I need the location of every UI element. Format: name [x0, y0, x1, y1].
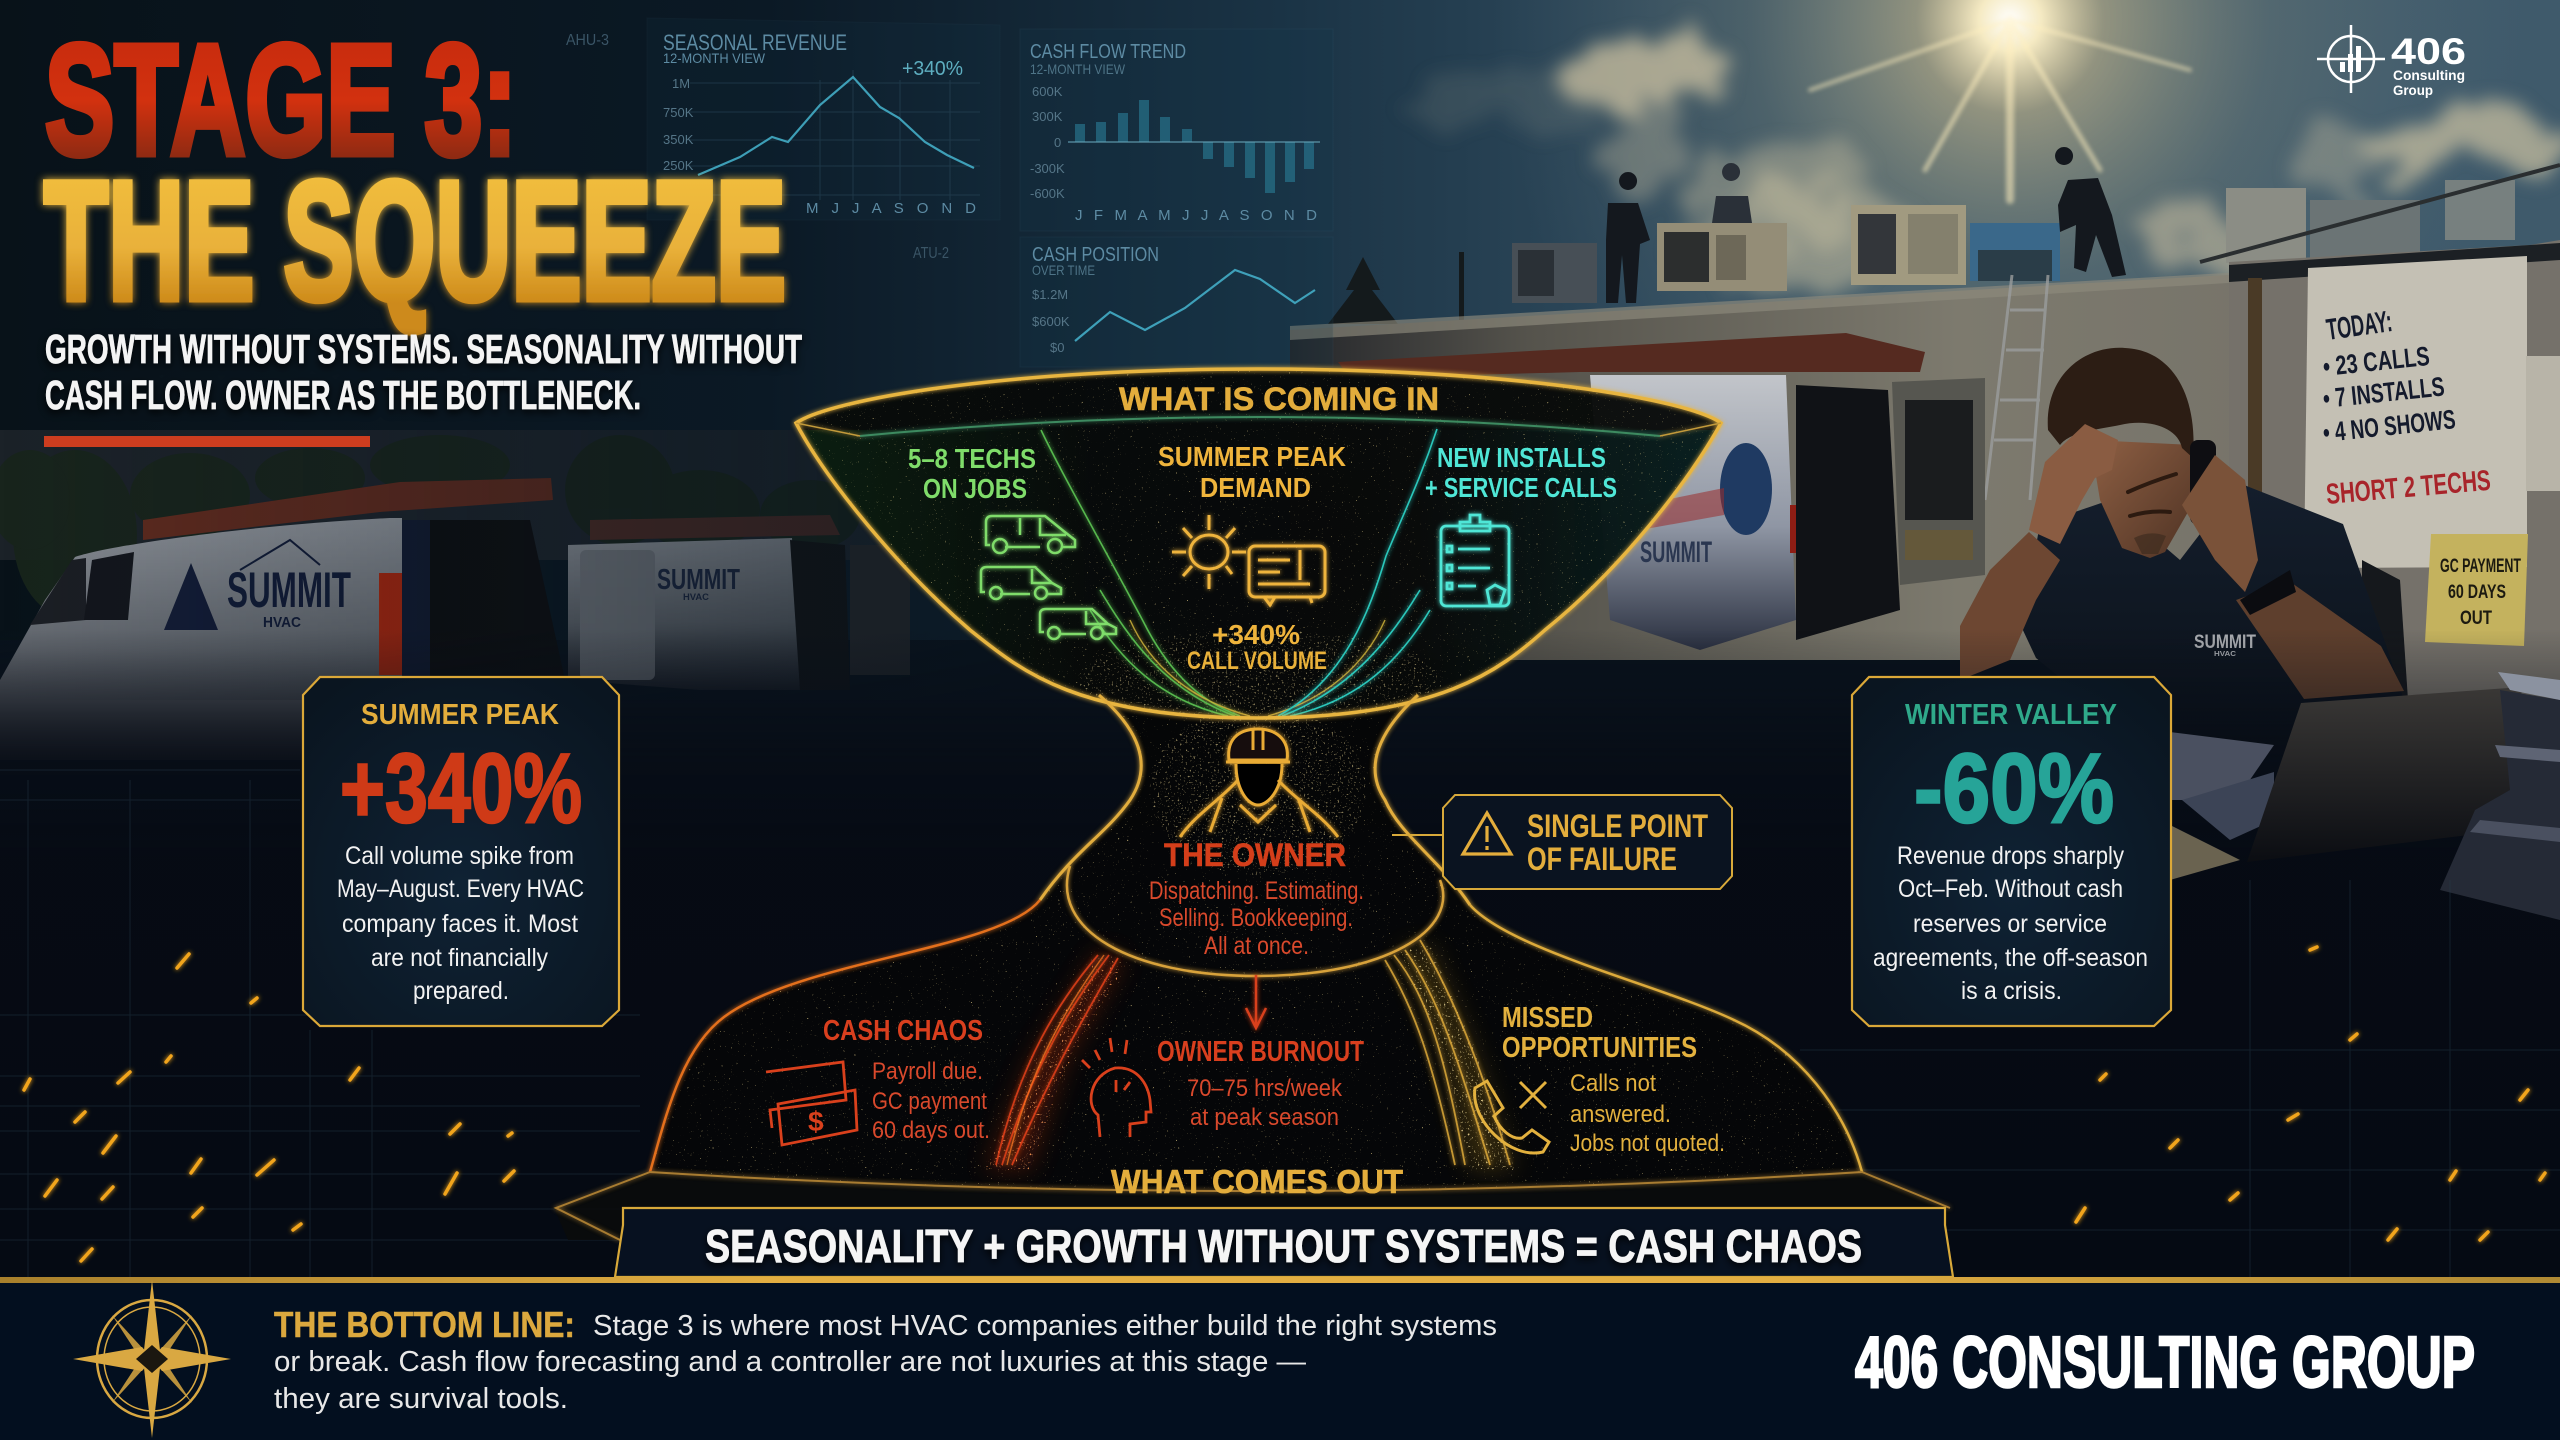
input: new installs and service calls: + SERVICE CALLS	[1425, 472, 1617, 503]
panel: summer peak: prepared.	[413, 977, 509, 1005]
blueprint annotations: AHU-3	[566, 32, 609, 49]
panel: winter valley: Oct–Feb. Without cash	[1898, 875, 2123, 903]
chart: cash position: CASH POSITION	[1032, 244, 1159, 266]
bottom line text: or break. Cash flow forecasting and a controller are not luxuries at this stage —	[274, 1346, 1306, 1378]
panel: winter valley: Revenue drops sharply	[1897, 842, 2124, 870]
panel: winter valley: agreements, the off-season	[1873, 944, 2148, 972]
site office wall and whiteboard: SHORT 2 TECHS	[2325, 465, 2492, 511]
output: missed opportunities: MISSED	[1502, 1002, 1593, 1034]
panel: summer peak	[303, 677, 619, 1026]
funnel rim and inner lip	[556, 369, 1950, 1240]
chart: seasonal revenue: +340%	[902, 58, 963, 80]
panel: summer peak: company faces it. Most	[342, 910, 578, 938]
input: summer peak demand: CALL VOLUME	[1187, 647, 1327, 675]
subtitle: CASH FLOW. OWNER AS THE BOTTLENECK.	[45, 372, 641, 418]
input: summer peak demand: DEMAND	[1200, 472, 1311, 503]
particle texture, lower	[650, 695, 1862, 1191]
icon: sun and AC unit	[1172, 515, 1325, 605]
chart: cash flow trend: J F M A M J J A S O N D	[1075, 207, 1317, 224]
output: cash chaos: 60 days out.	[872, 1117, 990, 1144]
chart: seasonal revenue: 1M	[672, 76, 690, 91]
input: summer peak demand: SUMMER PEAK	[1158, 441, 1346, 472]
icon: three vans	[981, 516, 1116, 639]
left fleet of SUMMIT vans: HVAC	[683, 592, 710, 602]
red roof rack ladder	[1338, 333, 1925, 378]
panel: winter valley: -60%	[1914, 733, 2114, 843]
stressed owner on the phone: SUMMIT	[2194, 632, 2256, 653]
site office wall and whiteboard: • 4 NO SHOWS	[2321, 404, 2457, 448]
HUD dashboard charts	[566, 18, 1333, 367]
chart: cash flow trend: -300K	[1030, 161, 1065, 176]
input: summer peak demand	[1158, 441, 1346, 675]
callout: single point of failure: SINGLE POINT	[1527, 808, 1708, 844]
output: owner burnout: at peak season	[1190, 1104, 1339, 1131]
chart: cash position: $1.2M	[1032, 287, 1068, 302]
chart: seasonal revenue: 12-MONTH VIEW	[663, 50, 766, 66]
chart: seasonal revenue	[647, 18, 1000, 220]
logo: 406 Consulting Group: 406	[2391, 31, 2466, 72]
laptop and paper stacks	[2170, 672, 2560, 920]
panel: summer peak: SUMMER PEAK	[361, 699, 559, 731]
left fleet of SUMMIT vans: SUMMIT	[227, 562, 351, 618]
worksite ladder	[1985, 275, 2048, 500]
icon: missed call phone	[1475, 1081, 1549, 1153]
blueprint grid lines	[0, 770, 2560, 1277]
blueprint annotations: ATU-2	[913, 245, 949, 262]
left fleet of SUMMIT vans: HVAC	[263, 614, 301, 631]
output: missed opportunities: Calls not	[1570, 1070, 1656, 1097]
bottom line text: THE BOTTOM LINE:	[274, 1304, 575, 1345]
owner text: Dispatching. Estimating.	[1149, 877, 1364, 905]
output: missed opportunities: Jobs not quoted.	[1570, 1130, 1725, 1157]
chart: seasonal revenue: SEASONAL REVENUE	[663, 30, 847, 55]
panel: summer peak: May–August. Every HVAC	[337, 875, 584, 903]
output: owner burnout: OWNER BURNOUT	[1157, 1036, 1364, 1068]
icon: clipboard checklist	[1441, 515, 1509, 606]
stressed owner on the phone: HVAC	[2214, 651, 2236, 658]
title: STAGE 3:	[45, 13, 517, 188]
panel: winter valley: WINTER VALLEY	[1905, 699, 2117, 731]
chart: seasonal revenue: 250K	[663, 158, 694, 173]
subtitle: GROWTH WITHOUT SYSTEMS. SEASONALITY WITHOUT	[45, 326, 802, 372]
icon: stressed head	[1082, 1038, 1151, 1137]
footer bar	[0, 1277, 2560, 1440]
chart: cash position: OVER TIME	[1032, 262, 1095, 278]
owner text: Selling. Bookkeeping.	[1159, 904, 1353, 932]
panel: winter valley: reserves or service	[1913, 910, 2107, 938]
site office wall and whiteboard: 60 DAYS	[2448, 582, 2506, 603]
icon: compass rose	[73, 1280, 231, 1438]
bottom line text	[274, 1304, 1497, 1415]
logo: 406 Consulting Group: Group	[2393, 82, 2433, 98]
input: new installs and service calls	[1425, 442, 1617, 606]
site office wall and whiteboard: • 23 CALLS	[2321, 341, 2431, 382]
output: owner burnout	[1082, 1036, 1364, 1137]
rooftop wall	[1290, 274, 2244, 660]
pine tree and pole	[1328, 252, 1464, 348]
chart: seasonal revenue: 750K	[663, 105, 694, 120]
callout: single point of failure: OF FAILURE	[1527, 841, 1677, 877]
chart: cash position	[1020, 237, 1333, 367]
output: cash chaos: CASH CHAOS	[823, 1015, 983, 1047]
input: new installs and service calls: NEW INSTALLS	[1437, 442, 1606, 473]
logo: 406 Consulting Group	[2317, 25, 2466, 98]
chart: seasonal revenue: M J J A S O N D	[806, 200, 976, 217]
output: missed opportunities: OPPORTUNITIES	[1502, 1032, 1697, 1064]
owner figure with hard hat	[1180, 729, 1338, 837]
icon: warning triangle	[1463, 813, 1511, 854]
arrow: owner to burnout	[1246, 975, 1266, 1028]
bottom line text: they are survival tools.	[274, 1383, 568, 1415]
heading: what comes out: WHAT COMES OUT	[1111, 1163, 1403, 1200]
callout: single point of failure	[1392, 795, 1732, 889]
chart: cash flow trend: CASH FLOW TREND	[1030, 41, 1186, 63]
equation banner: SEASONALITY + GROWTH WITHOUT SYSTEMS = CASH CHAOS	[705, 1220, 1862, 1272]
output: owner burnout: 70–75 hrs/week	[1187, 1075, 1343, 1102]
bottom line text: Stage 3 is where most HVAC companies either build the right systems	[593, 1310, 1497, 1342]
chart: cash flow trend: 600K	[1032, 84, 1063, 99]
red accent bar	[44, 436, 370, 447]
title	[44, 13, 786, 335]
blueprint annotations	[566, 32, 949, 262]
input: techs on jobs: ON JOBS	[923, 473, 1027, 504]
panel: summer peak: Call volume spike from	[345, 842, 574, 870]
left fleet of SUMMIT vans	[0, 430, 910, 760]
chart: cash flow trend: -600K	[1030, 186, 1065, 201]
logo: 406 Consulting Group: Consulting	[2393, 67, 2465, 83]
upper bowl	[796, 369, 1721, 718]
lower hourglass body	[650, 695, 1862, 1191]
chart: seasonal revenue: 350K	[663, 132, 694, 147]
site office wall and whiteboard	[2229, 240, 2560, 700]
site office wall and whiteboard: TODAY:	[2324, 305, 2394, 347]
owner text	[1149, 837, 1364, 960]
chart: cash position: $600K	[1032, 314, 1070, 329]
outflow streams	[985, 940, 1515, 1170]
rooftop HVAC units	[1512, 165, 2560, 303]
chart: cash flow trend: 12-MONTH VIEW	[1030, 61, 1126, 77]
base plinth	[554, 1172, 1950, 1240]
heading: what is coming in: WHAT IS COMING IN	[1119, 381, 1439, 417]
equation banner	[615, 1208, 1953, 1277]
site office wall and whiteboard: • 7 INSTALLS	[2321, 371, 2446, 414]
ember sparks	[24, 947, 2545, 1261]
stressed owner on the phone	[1960, 348, 2408, 760]
chart: cash flow trend	[1020, 29, 1333, 231]
panel: summer peak: are not financially	[371, 944, 548, 972]
output: cash chaos: Payroll due.	[872, 1058, 983, 1085]
panel: winter valley: is a crisis.	[1961, 977, 2062, 1005]
site office wall and whiteboard: GC PAYMENT	[2440, 556, 2521, 577]
input: techs on jobs	[908, 443, 1116, 639]
input: summer peak demand: +340%	[1212, 619, 1300, 650]
dense particles in neck	[1150, 705, 1366, 875]
service van behind funnel	[1590, 375, 1985, 650]
chart: cash flow trend: 300K	[1032, 109, 1063, 124]
icon: cash bills: $	[808, 1106, 824, 1137]
output: cash chaos	[766, 1015, 990, 1145]
left fleet of SUMMIT vans: SUMMIT	[657, 564, 740, 596]
subtitle	[45, 326, 802, 418]
panel: winter valley	[1852, 677, 2171, 1026]
owner text: All at once.	[1204, 932, 1309, 960]
chart: cash position: $0	[1050, 340, 1064, 355]
site office wall and whiteboard: OUT	[2460, 608, 2492, 629]
owner text: THE OWNER	[1164, 837, 1346, 873]
output: missed opportunities: answered.	[1570, 1101, 1671, 1128]
icon: cash bills	[766, 1062, 857, 1145]
hourglass funnel	[554, 369, 1950, 1240]
input: techs on jobs: 5–8 TECHS	[908, 443, 1036, 474]
rooftop workers	[1606, 147, 2126, 303]
panel: summer peak: +340%	[340, 733, 582, 843]
title: THE SQUEEZE	[44, 146, 786, 335]
output: missed opportunities	[1475, 1002, 1725, 1157]
chart: cash flow trend: 0	[1054, 135, 1061, 150]
output: cash chaos: GC payment	[872, 1088, 987, 1115]
service van behind funnel: SUMMIT	[1640, 536, 1712, 569]
